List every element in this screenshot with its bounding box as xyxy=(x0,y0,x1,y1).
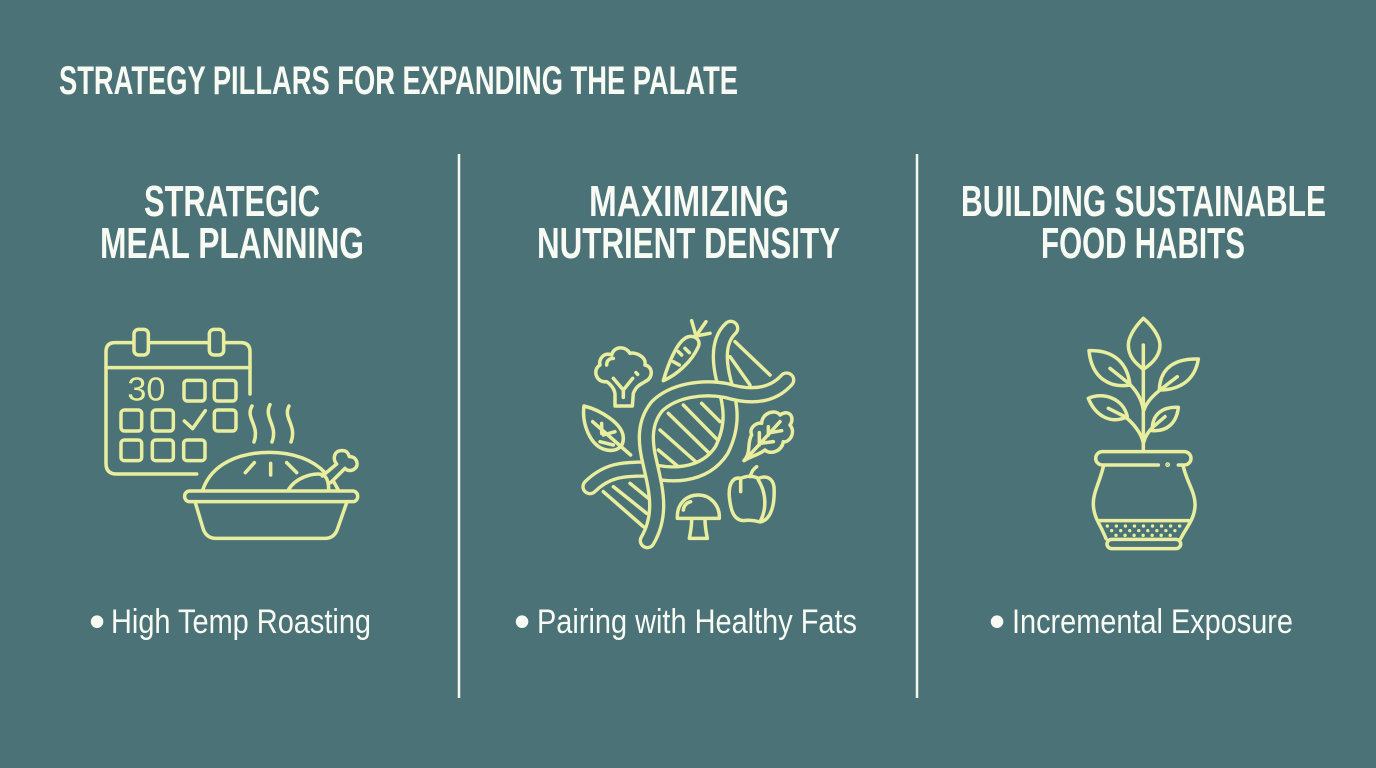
bullet: incremental exposure: • xyxy=(989,595,1005,647)
panel: building sustainable food habits xyxy=(961,177,1326,647)
icon: potted plant xyxy=(1088,318,1198,549)
heading: maximizing nutrient density: NUTRIENT DENSITY xyxy=(537,219,840,268)
panel: strategic meal planning xyxy=(89,177,371,647)
heading: strategic meal planning: MEAL PLANNING xyxy=(100,219,364,268)
bullet: high temp roasting xyxy=(89,595,371,647)
dna strands xyxy=(590,328,731,487)
icon: leaf xyxy=(584,406,623,450)
bullet: pairing with healthy fats: • xyxy=(514,595,530,647)
icon: dna helix with vegetables xyxy=(584,321,792,541)
title: STRATEGY PILLARS FOR EXPANDING THE PALATE xyxy=(59,59,738,103)
dna rungs xyxy=(658,403,720,467)
icon: kale leaf xyxy=(744,412,792,461)
heading: maximizing nutrient density: MAXIMIZING xyxy=(589,177,789,226)
icon: carrot xyxy=(663,336,699,381)
heading: building sustainable food habits: FOOD HABITS xyxy=(1041,219,1245,268)
heading: strategic meal planning: STRATEGIC xyxy=(144,177,320,226)
icon: broccoli xyxy=(596,348,651,406)
heading: strategic meal planning xyxy=(100,177,364,268)
bullet: incremental exposure: Incremental Exposure xyxy=(1012,603,1293,641)
panel: maximizing nutrient density xyxy=(514,177,857,647)
bullet: high temp roasting: High Temp Roasting xyxy=(111,603,371,641)
icon: calendar and roast dish: 30 xyxy=(127,371,165,408)
heading: maximizing nutrient density xyxy=(537,177,840,268)
bullet: incremental exposure xyxy=(989,595,1293,647)
icon: pepper xyxy=(729,476,774,522)
bullet: pairing with healthy fats xyxy=(514,595,857,647)
bullet: pairing with healthy fats: Pairing with Healthy Fats xyxy=(537,603,857,641)
heading: building sustainable food habits xyxy=(961,177,1326,268)
bullet: high temp roasting: • xyxy=(89,595,105,647)
icon: calendar and roast dish xyxy=(106,329,358,538)
icon: mushroom xyxy=(677,495,719,518)
